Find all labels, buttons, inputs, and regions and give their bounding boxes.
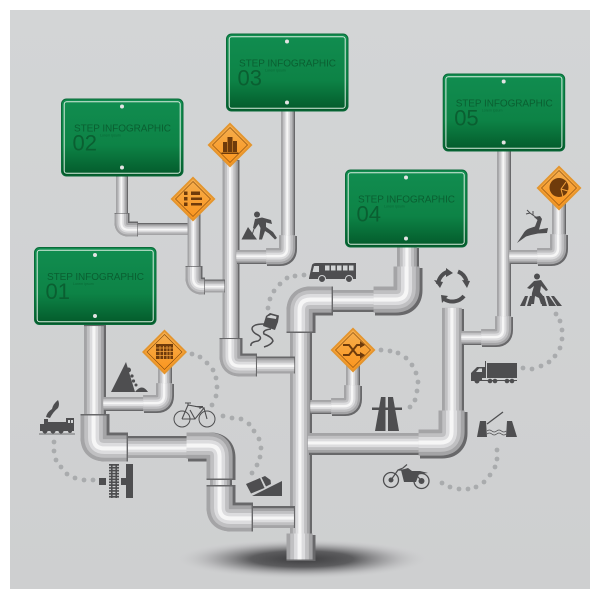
icon: pedestrian crossing <box>520 274 562 306</box>
dotted path: bus to slippery car <box>266 273 306 310</box>
pipe collar: pie chart sign elbow <box>537 234 559 257</box>
pipe collar: step 01 first elbow <box>94 414 128 448</box>
pipe: step 03 branch <box>236 110 288 257</box>
panel: step 01 sign: 01 <box>46 279 70 304</box>
pipe collar: step 02 elbow <box>121 213 138 230</box>
panel: step 05 sign: 05 <box>454 106 479 130</box>
panel: step 02 sign <box>62 99 183 176</box>
icon: highway <box>372 397 402 431</box>
icon: bus <box>309 263 356 282</box>
pipe collar: trunk upper right elbow <box>374 267 408 301</box>
icon: bicycle <box>174 403 215 427</box>
panel: step 02 sign: 02 <box>72 130 97 156</box>
panel: step 02 sign: Lorem ipsum <box>100 134 121 138</box>
panel: step 05 sign <box>443 74 565 151</box>
dotted path: bicycle to truck on slope <box>221 414 263 475</box>
dotted path: pedestrian crossing to truck <box>521 312 564 371</box>
dotted path: calendar sign to bicycle <box>190 352 219 407</box>
icon: calendar diamond sign <box>142 330 187 374</box>
pipe: pie chart sign branch <box>509 199 559 257</box>
pipe: main trunk <box>300 247 408 548</box>
dotted path: shuffle sign to highway <box>379 348 420 409</box>
panel: step 05 sign: STEP INFOGRAPHIC <box>456 98 553 110</box>
pipe collar: calendar sign elbow <box>143 383 165 404</box>
icon: truck on slope <box>246 476 282 496</box>
icon: bar chart diamond sign <box>208 122 252 168</box>
pipe collar: trunk top elbow <box>300 300 333 333</box>
icon: list diamond sign <box>170 176 216 222</box>
panel: step 01 sign: STEP INFOGRAPHIC <box>47 272 144 283</box>
panel: step 05 sign: Lorem ipsum <box>482 108 502 112</box>
pipe: list sign branch <box>193 210 225 287</box>
pipe: step 02 branch <box>121 176 188 230</box>
pipe collar: step 03 elbow <box>266 235 288 257</box>
icon: drawbridge <box>477 412 517 437</box>
pipe collar: right branch elbow <box>419 411 453 444</box>
dotted path: motorcycle to bridge <box>440 448 499 491</box>
pipe collar: list sign elbow <box>193 266 205 287</box>
panel: step 01 sign <box>34 248 156 324</box>
icon: slippery car <box>251 313 279 347</box>
icon: pie chart diamond sign <box>536 166 582 210</box>
icon: road worker <box>242 212 277 240</box>
pipe collar: step 01 third elbow <box>220 485 253 518</box>
icon: delivery truck <box>471 361 517 384</box>
panel: step 02 sign: STEP INFOGRAPHIC <box>74 124 171 134</box>
panel: step 04 sign: STEP INFOGRAPHIC <box>358 194 455 206</box>
pipe collar: step 01 second elbow <box>187 446 221 480</box>
pipe collar: step 05 elbow <box>481 316 504 338</box>
pipe collar: trunk foot <box>300 534 301 561</box>
panel: step 03 sign: Lorem ipsum <box>265 68 286 72</box>
icon: shuffle diamond sign <box>330 328 376 372</box>
panel: step 04 sign: 04 <box>356 202 381 226</box>
icon: motorcycle <box>384 464 429 488</box>
icon: recycle arrows <box>434 268 470 303</box>
ground shadow under trunk <box>174 539 430 579</box>
pipe: calendar sign branch <box>103 364 165 404</box>
panel: step 03 sign: 03 <box>238 66 262 90</box>
pipe: step 05 branch <box>461 150 504 338</box>
icon: rock fall <box>111 362 148 392</box>
pipe collar: shuffle sign elbow <box>331 385 353 407</box>
pipe: shuffle sign branch <box>310 364 353 407</box>
icon: steam train <box>39 400 75 434</box>
pipe: right branch <box>308 308 453 444</box>
pipe: step 01 branch <box>94 325 295 518</box>
dotted path: train to track <box>52 440 95 482</box>
panel: step 01 sign: Lorem ipsum <box>73 282 94 286</box>
panel: step 04 sign: Lorem ipsum <box>384 204 405 208</box>
pipe: bar chart sign branch <box>230 160 295 366</box>
icon: railway track junction <box>99 464 133 498</box>
panel: step 04 sign <box>346 170 467 247</box>
pipe collar: bar chart sign elbow <box>230 338 257 366</box>
panel: step 03 sign <box>226 34 348 111</box>
panel: step 03 sign: STEP INFOGRAPHIC <box>239 58 336 70</box>
icon: deer <box>517 210 548 243</box>
